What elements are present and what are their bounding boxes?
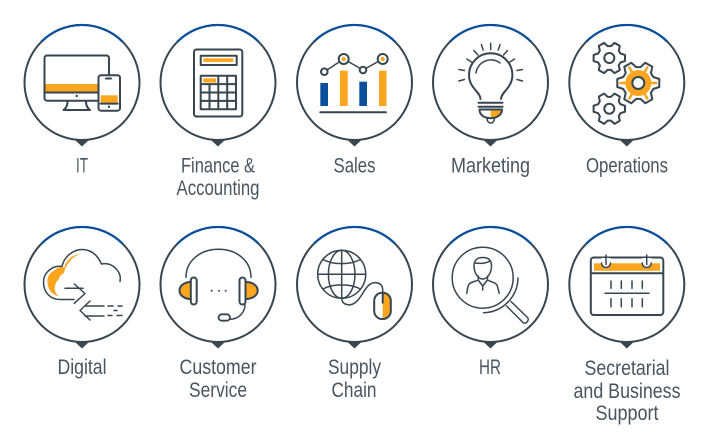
icon: headset xyxy=(180,249,258,321)
label: Customer Service: Service xyxy=(189,378,247,402)
icon: light bulb xyxy=(459,43,522,123)
panel: Customer Service xyxy=(160,227,276,402)
label: Finance & Accounting xyxy=(176,154,260,200)
icon: gears xyxy=(594,43,659,124)
badge ring xyxy=(569,227,684,348)
panel: Operations xyxy=(569,25,684,178)
label: Customer Service xyxy=(180,355,256,402)
icon: bar and line chart xyxy=(320,54,388,112)
panel: Sales xyxy=(297,25,412,178)
panel: HR xyxy=(433,227,548,379)
icon: calculator xyxy=(194,50,242,116)
icon: cloud with arrows xyxy=(44,250,122,320)
label: Supply Chain xyxy=(328,355,381,402)
badge ring xyxy=(297,227,412,348)
panel: Finance & Accounting xyxy=(160,25,276,200)
label: HR: HR xyxy=(479,355,501,379)
badge ring xyxy=(569,25,684,147)
label: Secretarial and Business Support: and Business xyxy=(574,379,680,403)
panel: Secretarial and Business Support xyxy=(569,227,684,425)
label: Marketing: Marketing xyxy=(451,154,530,178)
label: IT: IT xyxy=(76,154,88,178)
label: Secretarial and Business Support xyxy=(574,356,680,425)
label: Customer Service: Customer xyxy=(180,355,256,379)
badge ring xyxy=(160,25,276,147)
badge ring xyxy=(24,25,140,147)
label: Operations: Operations xyxy=(586,154,668,178)
badge ring xyxy=(160,227,276,348)
badge ring xyxy=(433,227,548,348)
icon: monitor and phone xyxy=(44,56,120,111)
icon: globe and mouse xyxy=(318,250,391,319)
panel: IT xyxy=(24,25,140,178)
label: Supply Chain: Supply xyxy=(328,355,381,379)
label: Finance & Accounting: Accounting xyxy=(176,176,260,200)
panel: Supply Chain xyxy=(297,227,412,402)
label: Finance & Accounting: Finance & xyxy=(181,154,255,178)
label: Digital: Digital xyxy=(58,355,106,379)
label: Secretarial and Business Support: Support xyxy=(596,401,659,425)
icon: magnifier with person xyxy=(452,247,528,323)
badge ring xyxy=(433,25,548,147)
label: Sales: Sales xyxy=(334,154,376,178)
icon: calendar xyxy=(591,255,663,315)
badge ring xyxy=(297,25,412,147)
panel: Digital xyxy=(24,227,140,379)
panel: Marketing xyxy=(433,25,548,178)
badge ring xyxy=(24,227,140,348)
label: Supply Chain: Chain xyxy=(332,378,376,402)
label: Secretarial and Business Support: Secretarial xyxy=(584,356,670,380)
